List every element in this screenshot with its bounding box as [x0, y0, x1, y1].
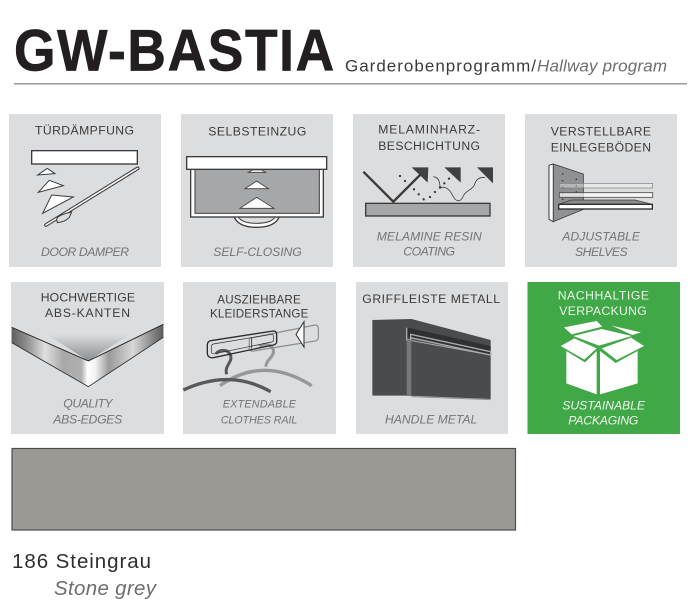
- caption: extendable clothes rail: EXTENDABLE: [223, 398, 297, 410]
- icon: self-closing drawer: [187, 157, 327, 227]
- caption: sustainable packaging: PACKAGING: [568, 413, 638, 427]
- icon: open cardboard box: [561, 321, 644, 394]
- caption: extendable clothes rail: CLOTHES RAIL: [221, 414, 297, 426]
- icon: door damper: [32, 151, 138, 225]
- subtitle: [345, 56, 667, 75]
- subtitle: Garderobenprogramm/: [345, 56, 536, 75]
- heading: Türdämpfung: TÜRDÄMPFUNG: [35, 123, 134, 137]
- heading: Hochwertige ABS-Kanten: HOCHWERTIGE: [41, 291, 135, 305]
- caption: melamine resin coating: COATING: [403, 245, 455, 259]
- caption: adjustable shelves: ADJUSTABLE: [561, 229, 641, 243]
- heading: Melaminharz-Beschichtung: MELAMINHARZ-: [378, 123, 480, 137]
- panel: melamine resin coating: [353, 114, 505, 267]
- panel: extendable clothes rail: [183, 282, 336, 434]
- icon: ABS edge: [12, 324, 163, 387]
- heading: Griffleiste Metall: GRIFFLEISTE METALL: [362, 292, 500, 306]
- panel: quality ABS edges: [11, 282, 164, 434]
- heading: Ausziehbare Kleiderstange: KLEIDERSTANGE: [210, 308, 309, 321]
- icon: adjustable shelves: [549, 164, 653, 222]
- heading: Ausziehbare Kleiderstange: [210, 293, 309, 321]
- heading: Nachhaltige Verpackung: [558, 289, 649, 318]
- label: Stone grey: Stone grey: [54, 577, 158, 600]
- heading: Melaminharz-Beschichtung: [378, 123, 480, 153]
- heading: Nachhaltige Verpackung: NACHHALTIGE: [558, 289, 649, 303]
- heading: Hochwertige ABS-Kanten: ABS-KANTEN: [45, 306, 130, 320]
- panel: sustainable packaging: [528, 282, 680, 434]
- icon: clothes rail with hangers: [183, 322, 318, 392]
- panel: adjustable shelves: [525, 114, 677, 267]
- heading: Hochwertige ABS-Kanten: [41, 291, 135, 320]
- heading: Verstellbare Einlegeböden: VERSTELLBARE: [551, 125, 651, 139]
- panel: handle metal: [356, 282, 508, 434]
- caption: melamine resin coating: [377, 229, 482, 259]
- colour swatch: stone grey: [12, 448, 516, 530]
- caption: door damper: DOOR DAMPER: [41, 245, 129, 259]
- heading: Melaminharz-Beschichtung: BESCHICHTUNG: [378, 139, 480, 153]
- caption: melamine resin coating: MELAMINE RESIN: [377, 229, 482, 243]
- caption: quality ABS edges: QUALITY: [63, 396, 114, 410]
- caption: adjustable shelves: [561, 229, 641, 259]
- caption: self-closing: SELF-CLOSING: [213, 245, 302, 259]
- caption: handle metal: HANDLE METAL: [385, 412, 477, 426]
- subtitle: Hallway program: [537, 56, 667, 75]
- title: GW-BASTIA: [14, 19, 334, 83]
- label: 186 Steingrau: 186 Steingrau: [12, 550, 151, 573]
- caption: quality ABS edges: [52, 396, 122, 426]
- panel: self-closing: [181, 114, 333, 267]
- caption: adjustable shelves: SHELVES: [575, 245, 628, 259]
- panel: door damper: [9, 114, 161, 267]
- icon: metal handle profile: [372, 319, 491, 400]
- heading: Ausziehbare Kleiderstange: AUSZIEHBARE: [217, 293, 301, 306]
- caption: extendable clothes rail: [221, 398, 297, 426]
- heading: Verstellbare Einlegeböden: EINLEGEBÖDEN: [551, 141, 651, 155]
- heading: Verstellbare Einlegeböden: [551, 125, 651, 155]
- heading: Nachhaltige Verpackung: VERPACKUNG: [559, 304, 647, 318]
- caption: quality ABS edges: ABS-EDGES: [52, 412, 122, 426]
- heading: Selbsteinzug: SELBSTEINZUG: [208, 124, 306, 138]
- caption: sustainable packaging: SUSTAINABLE: [562, 398, 646, 412]
- icon: melamine coating: [363, 167, 493, 216]
- caption: sustainable packaging: [562, 398, 646, 427]
